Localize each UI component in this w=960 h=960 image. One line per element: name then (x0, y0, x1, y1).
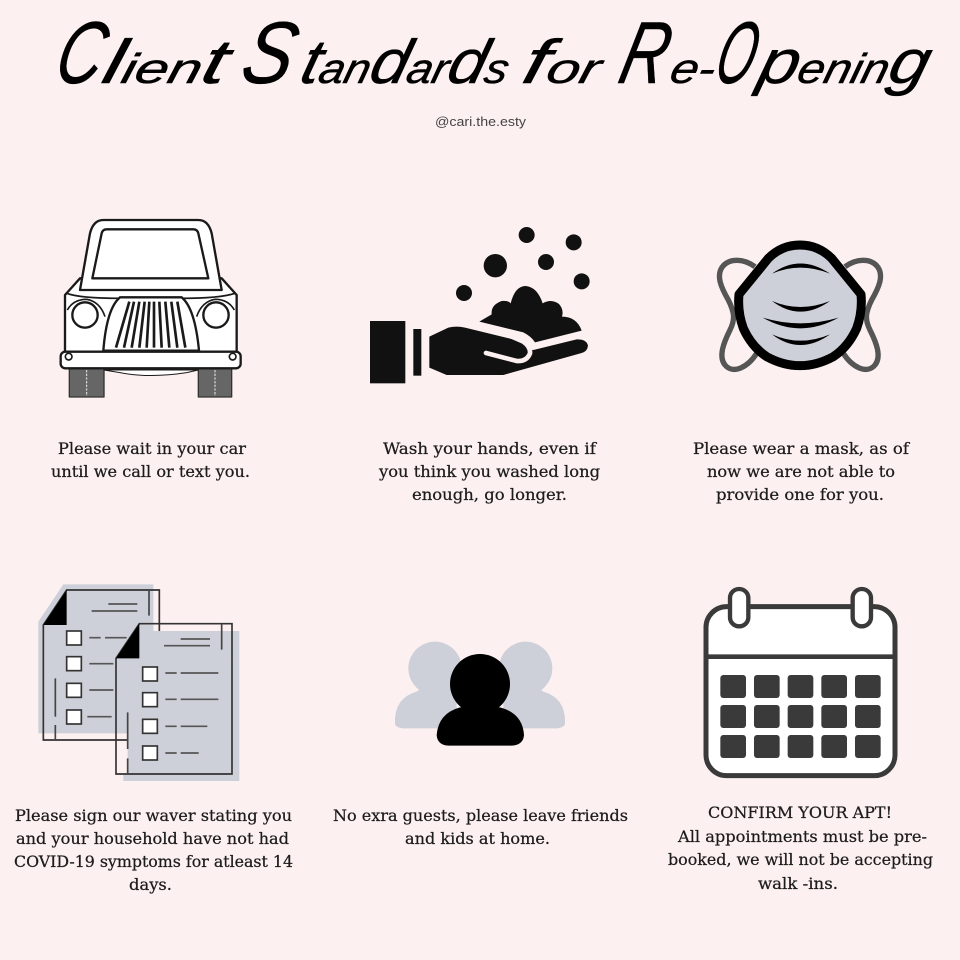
caption: car (51, 439, 250, 481)
caption: mask (693, 439, 910, 504)
car underbody (104, 370, 198, 375)
car body (65, 278, 237, 352)
car windshield (92, 229, 208, 278)
title: e- (666, 46, 721, 93)
hand (429, 327, 588, 375)
car headlights (67, 299, 234, 328)
title: lient (97, 28, 240, 97)
icon: people (395, 642, 565, 746)
icon: calendar (706, 589, 895, 776)
caption: wash: you think you washed long (378, 462, 600, 481)
title: pening (750, 28, 939, 97)
date cells (720, 675, 881, 758)
caption: car: until we call or text you. (51, 462, 250, 481)
icon: car (61, 220, 241, 397)
caption: confirm appointment: CONFIRM YOUR APT! (708, 803, 892, 822)
main person (437, 654, 524, 746)
caption: guests: and kids at home. (405, 829, 550, 848)
title: tandards (295, 28, 519, 97)
calendar frame (706, 607, 895, 776)
cuff (370, 321, 405, 383)
title: R (611, 3, 682, 102)
title: C (47, 3, 118, 102)
front document (116, 624, 239, 781)
car grille (103, 297, 199, 351)
ear loops (719, 260, 881, 369)
car bumper (61, 352, 241, 368)
caption: confirm appointment (668, 803, 933, 893)
icon: waiver documents (38, 584, 239, 781)
title: S (233, 4, 308, 102)
title: O (707, 4, 769, 102)
handle: @cari.the.esty (435, 114, 527, 129)
pleats (763, 263, 839, 345)
icon: mask (719, 245, 881, 369)
caption: wash: enough, go longer. (412, 485, 567, 504)
caption: confirm appointment: All appointments must be pre- (677, 827, 927, 846)
caption: confirm appointment: booked, we will not be accepting (668, 850, 933, 869)
car tyres (69, 368, 232, 397)
caption: guests (333, 806, 628, 848)
title (47, 3, 939, 102)
guests (395, 642, 565, 728)
bubbles (456, 227, 590, 301)
car cabin (80, 220, 222, 290)
mask body (739, 245, 861, 366)
caption: wash: Wash your hands, even if (383, 439, 597, 458)
hand creases (486, 334, 580, 361)
caption: guests: No exra guests, please leave friends (333, 806, 628, 825)
caption: confirm appointment: walk -ins. (758, 874, 838, 893)
caption: mask: provide one for you. (716, 485, 884, 504)
foam (479, 286, 582, 342)
caption: waiver (14, 806, 293, 894)
rings (730, 589, 871, 626)
caption: waiver: and your household have not had (16, 829, 289, 848)
caption: waiver: COVID-19 symptoms for atleast 14 (14, 852, 293, 871)
icon: washing hand (370, 227, 590, 383)
caption: waiver: days. (129, 875, 172, 894)
title: for (517, 28, 613, 97)
caption: wash (378, 439, 600, 504)
caption: car: Please wait in your car (58, 439, 246, 458)
caption: mask: now we are not able to (707, 462, 895, 481)
caption: waiver: Please sign our waver stating you (15, 806, 292, 825)
back document (38, 584, 159, 740)
caption: mask: Please wear a mask, as of (693, 439, 910, 458)
